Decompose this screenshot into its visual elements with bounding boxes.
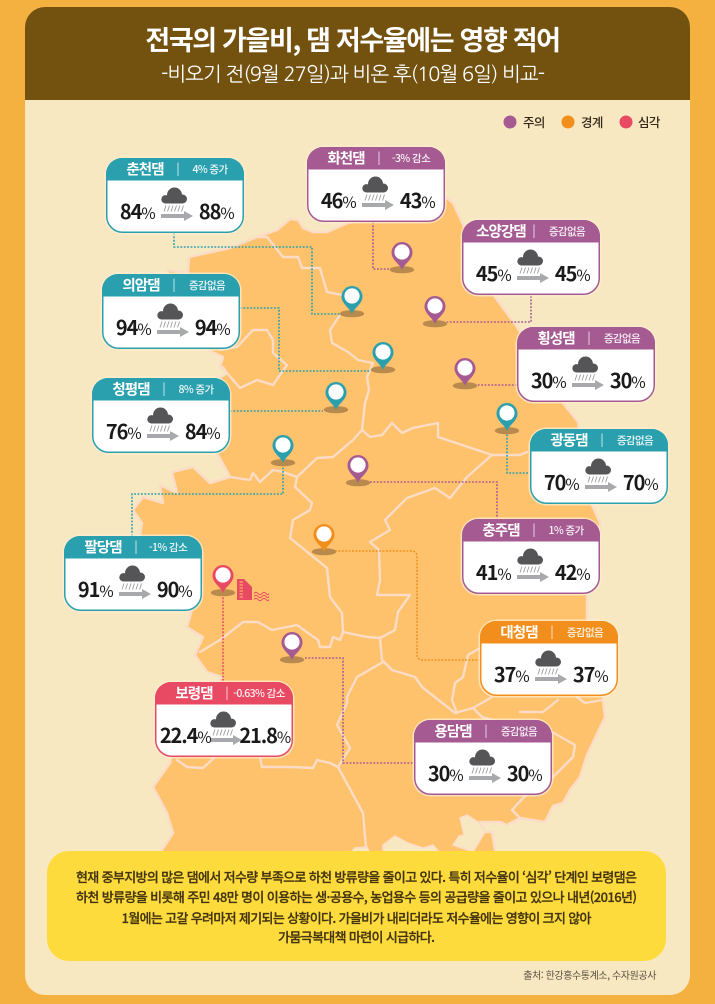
card: 충주댐: 42% <box>555 557 590 586</box>
icon: dam <box>237 579 269 601</box>
card: 의암댐 <box>100 272 242 350</box>
card: 충주댐 <box>460 518 602 596</box>
callout: summary text box: 현재 중부지방의 많은 댐에서 저수량 부족으로 하천 방류량을 줄이고 있다. 특히 저수율이 ‘심각’ 단계인 보령댐은 <box>76 867 637 886</box>
card: 보령댐 <box>154 680 294 758</box>
card: 충주댐: 충주댐 <box>482 520 520 540</box>
card: 광동댐: 증감없음 <box>617 433 654 448</box>
legend: 주의 <box>523 112 545 131</box>
card: 의암댐: 의암댐 <box>122 274 160 296</box>
card: 소양강댐: 45% <box>555 258 590 287</box>
card: 보령댐: 22.4% <box>160 720 211 749</box>
card: 청평댐: 84% <box>185 416 220 445</box>
card: 용담댐: 용담댐 <box>434 720 472 742</box>
card: 횡성댐: 30% <box>610 365 645 394</box>
legend: 경계 <box>581 112 603 131</box>
card: 대청댐: 37% <box>494 659 529 688</box>
card: 춘천댐: 4% 증가 <box>192 162 228 177</box>
card: 팔당댐: 90% <box>157 574 192 603</box>
subtitle: -비오기 전(9월 27일)과 비온 후(10월 6일) 비교- <box>161 64 545 84</box>
card: 춘천댐 <box>104 156 246 234</box>
callout: summary text box: 1월에는 고갈 우려마저 제기되는 상황이다. 가을비가 내리더라도 저수율에는 영향이 크지 않아 <box>122 908 592 927</box>
title: 전국의 가을비, 댐 저수율에는 영향 적어 <box>145 19 560 58</box>
card: 화천댐: -3% 감소 <box>392 151 431 166</box>
card: 광동댐: 70% <box>544 467 579 496</box>
map of South Korea <box>133 198 605 856</box>
card: 소양강댐 <box>460 218 602 296</box>
card: 화천댐: 46% <box>321 185 356 214</box>
callout: summary text box <box>47 851 666 961</box>
card: 광동댐 <box>528 428 670 506</box>
card: 팔당댐: -1% 감소 <box>149 540 188 555</box>
card: 의암댐: 94% <box>195 312 230 341</box>
card: 팔당댐 <box>62 534 204 612</box>
card: 횡성댐 <box>516 326 656 404</box>
card: 춘천댐: 84% <box>120 196 155 225</box>
card: 의암댐: 증감없음 <box>189 278 226 293</box>
card: 소양강댐: 소양강댐 <box>476 220 526 242</box>
source note: 출처: 한강홍수통계소, 수자원공사 <box>523 967 656 982</box>
card: 보령댐: 보령댐 <box>175 682 213 704</box>
callout: summary text box: 하천 방류량을 비롯해 주민 48만 명이 이용하는 생·공용수, 농업용수 등의 공급량을 줄이고 있으나 내년(2016년) <box>76 887 637 906</box>
card: 광동댐: 70% <box>623 467 658 496</box>
card: 청평댐 <box>90 376 232 454</box>
card: 광동댐: 광동댐 <box>550 430 588 450</box>
card: 대청댐: 증감없음 <box>567 625 604 640</box>
card: 용담댐: 30% <box>507 758 542 787</box>
card: 횡성댐: 30% <box>531 365 566 394</box>
card: 횡성댐: 횡성댐 <box>537 328 575 348</box>
card: 용담댐: 30% <box>428 758 463 787</box>
card: 청평댐: 청평댐 <box>112 378 150 400</box>
card: 보령댐: 21.8% <box>239 720 291 749</box>
card: 충주댐: 1% 증가 <box>548 523 584 538</box>
card: 소양강댐: 45% <box>476 258 511 287</box>
card: 용담댐 <box>412 718 554 796</box>
legend: 심각 <box>638 112 661 131</box>
card: 대청댐: 37% <box>573 659 608 688</box>
header band <box>25 7 690 100</box>
connector lines <box>132 222 531 763</box>
card: 춘천댐: 88% <box>199 196 234 225</box>
card: 춘천댐: 춘천댐 <box>126 158 164 180</box>
callout: summary text box: 가뭄극복대책 마련이 시급하다. <box>278 927 435 946</box>
card: 대청댐: 대청댐 <box>500 622 538 642</box>
card: 용담댐: 증감없음 <box>501 724 538 739</box>
card: 화천댐: 43% <box>400 185 435 214</box>
card: 팔당댐: 91% <box>78 574 113 603</box>
card: 청평댐: 8% 증가 <box>178 382 214 397</box>
card: 화천댐: 화천댐 <box>327 148 365 168</box>
card: 의암댐: 94% <box>116 312 151 341</box>
map pins <box>211 242 519 663</box>
card: 청평댐: 76% <box>106 416 141 445</box>
card: 화천댐 <box>306 146 446 224</box>
card: 보령댐: -0.63% 감소 <box>233 686 286 701</box>
card: 충주댐: 41% <box>476 557 511 586</box>
card: 횡성댐: 증감없음 <box>604 331 641 346</box>
card: 소양강댐: 증감없음 <box>549 224 586 239</box>
card: 팔당댐: 팔당댐 <box>84 536 122 558</box>
legend <box>504 112 661 131</box>
card: 대청댐 <box>478 620 620 698</box>
